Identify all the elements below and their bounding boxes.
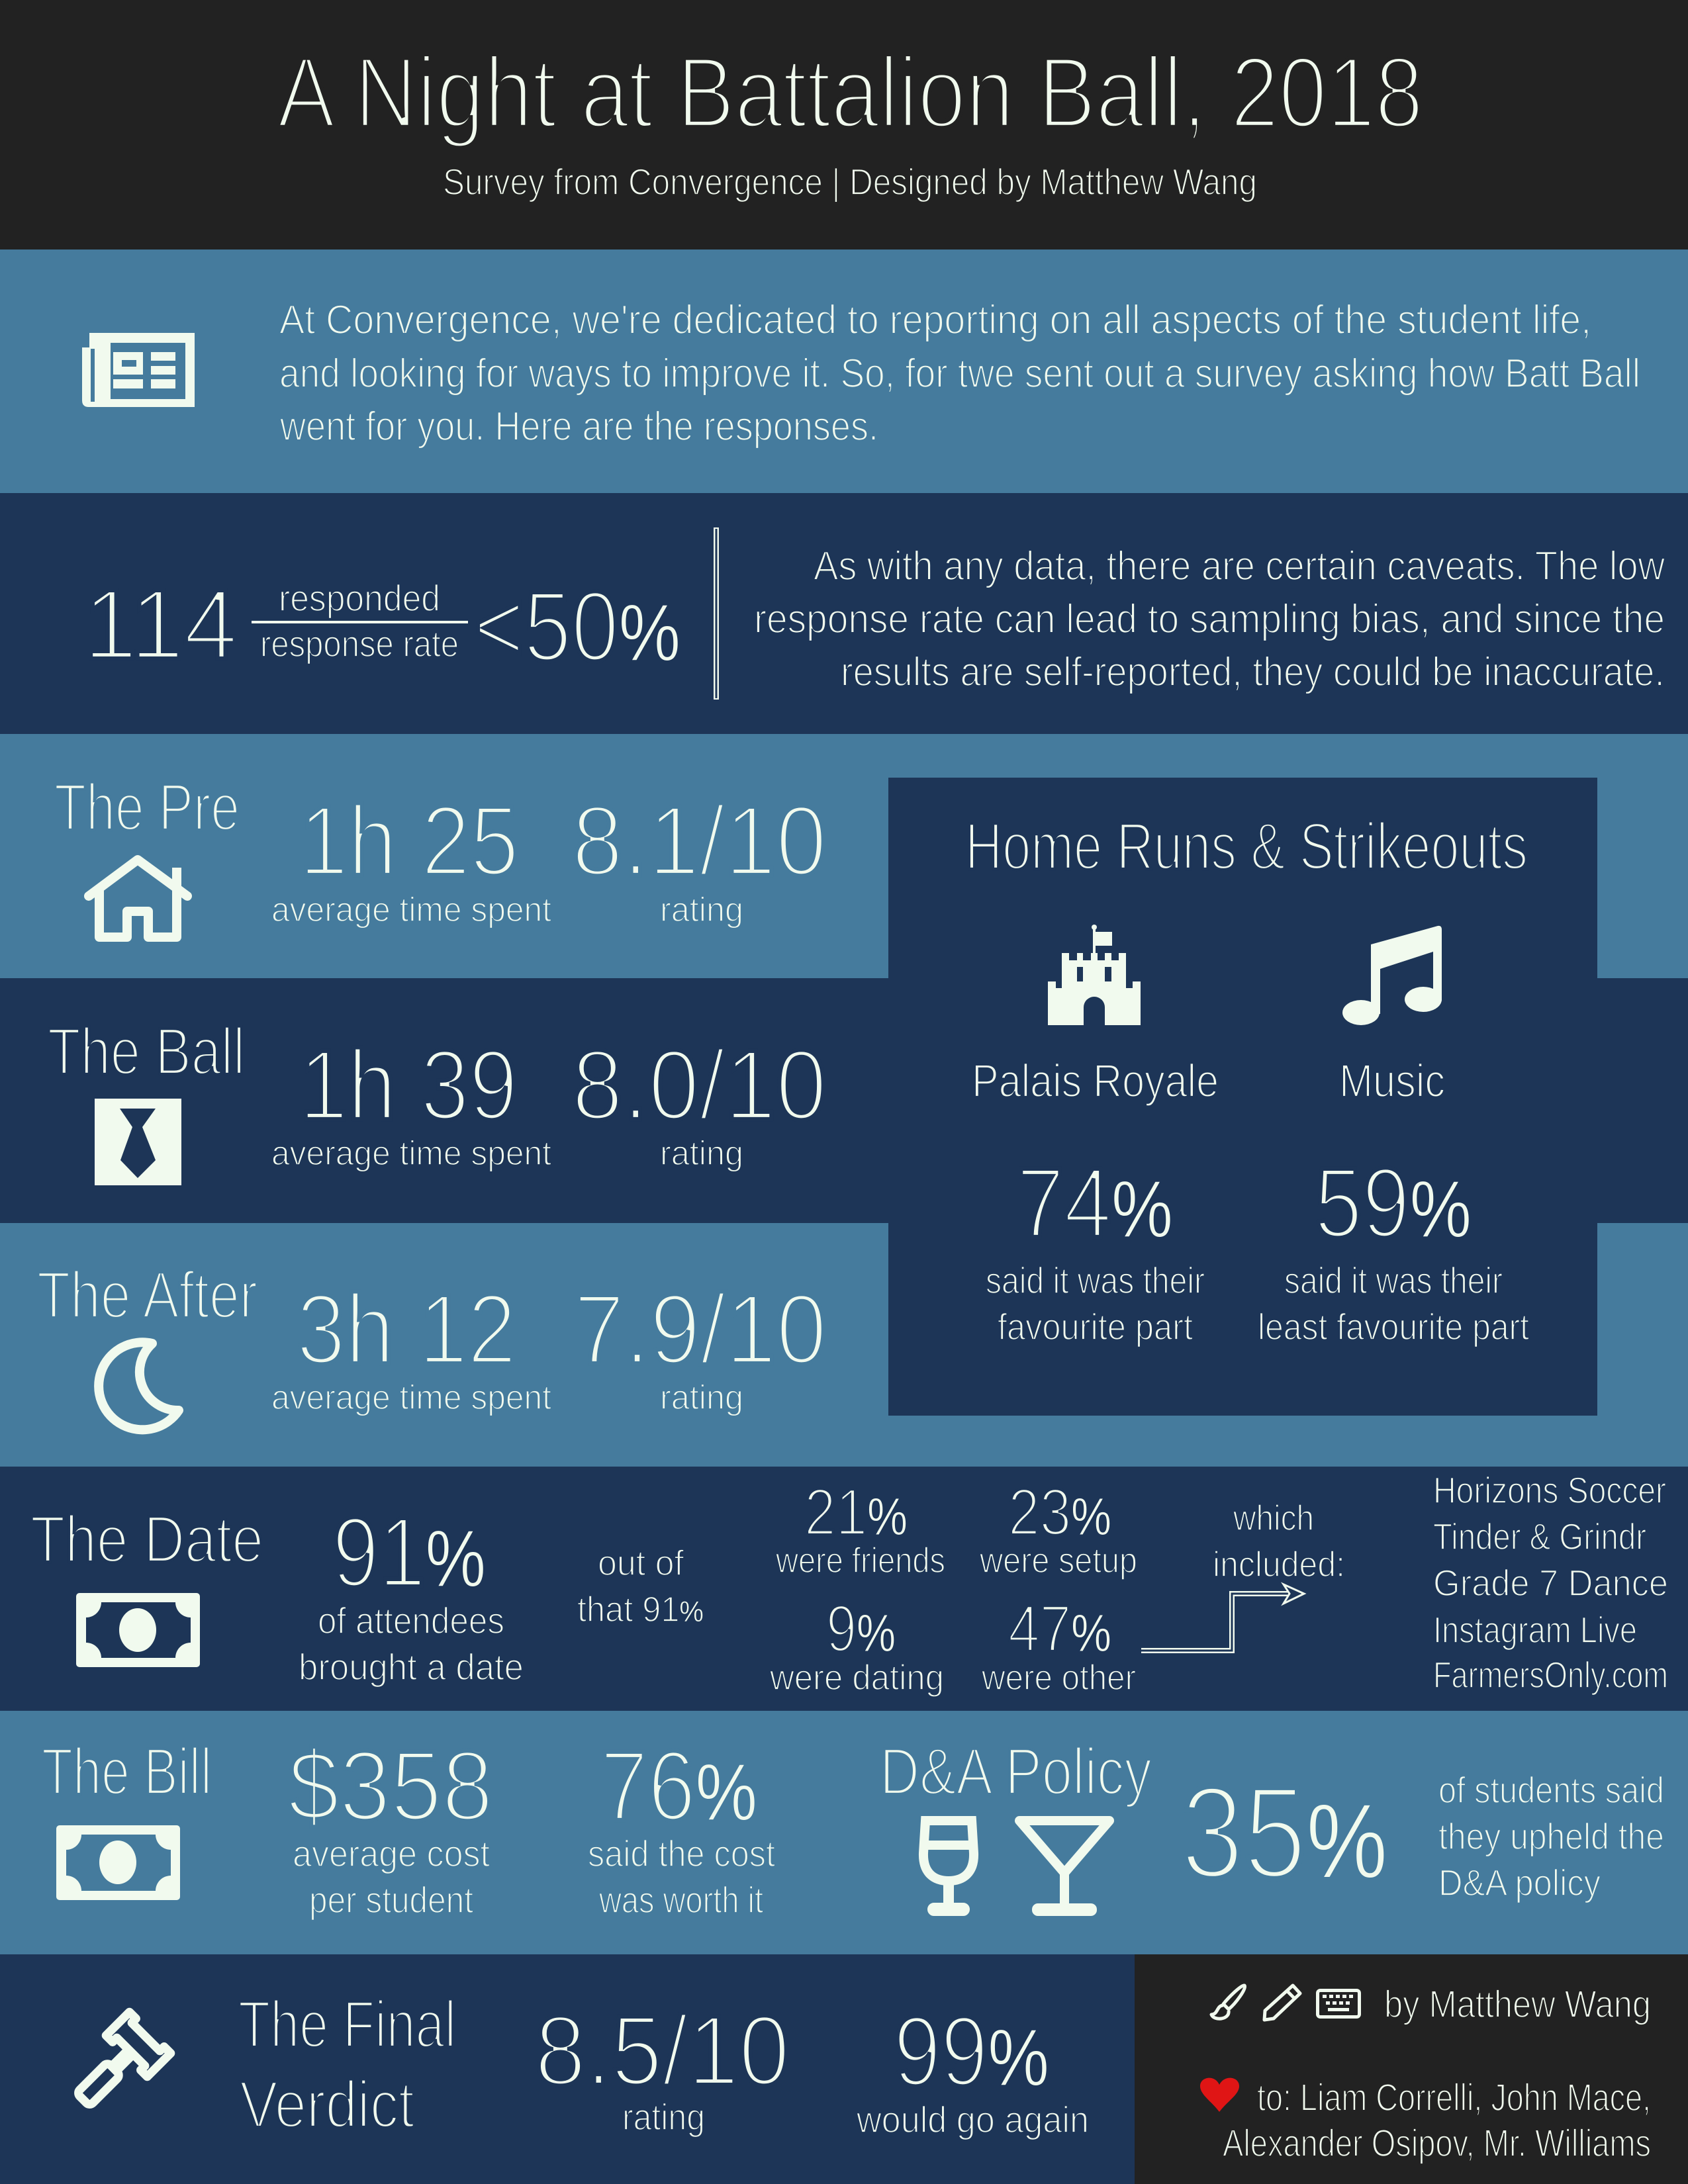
list of other dates: Instagram Live — [1433, 1609, 1637, 1651]
icon: gavel — [62, 2012, 171, 2120]
stat: 91 percent brought a date: 91% — [332, 1496, 486, 1608]
panel: The Bill and D&A Policy — [0, 1711, 1688, 1954]
stat: would go again: would go again — [856, 2099, 1089, 2140]
time spent: average time spent — [271, 1379, 552, 1417]
panel: The Final Verdict — [0, 1954, 1135, 2184]
time spent: 3h 12 — [297, 1273, 516, 1385]
stat: friends: 21% — [804, 1475, 908, 1549]
stat: 91 percent brought a date: of attendees — [318, 1600, 504, 1641]
column: Music: Music — [1339, 1055, 1445, 1107]
intro paragraph — [279, 297, 1640, 449]
rating: 7.9/10 — [574, 1273, 827, 1385]
label: upheld the policy — [1438, 1769, 1664, 1903]
heading: D&A Policy: D&A Policy — [880, 1735, 1152, 1809]
fraction labels — [252, 577, 468, 664]
stat: worth it: was worth it — [598, 1879, 763, 1921]
column: Music: 59% — [1315, 1147, 1472, 1258]
stat: worth it — [588, 1730, 775, 1921]
credit: thanks — [1223, 2076, 1651, 2165]
stat: worth it: said the cost — [588, 1833, 775, 1874]
stat: average cost: $358 — [288, 1730, 493, 1841]
list of other dates — [1433, 1469, 1668, 1696]
stat: 91 percent brought a date: brought a date — [299, 1646, 524, 1688]
heading: The After: The After — [37, 1258, 258, 1332]
time spent: 1h 25 — [299, 785, 519, 896]
stat: setup: 23% — [1008, 1475, 1111, 1549]
icon: martini glass — [1019, 1821, 1109, 1911]
column: Palais Royale — [972, 1055, 1219, 1347]
icon: newspaper — [82, 333, 195, 407]
panel: Home Runs and Strikeouts — [888, 778, 1597, 1416]
heading: The Pre: The Pre — [54, 770, 240, 844]
credit: by Matthew Wang: by Matthew Wang — [1384, 1983, 1651, 2026]
subtitle: Survey from Convergence | Designed by Matthew Wang — [443, 161, 1257, 203]
stat: rating: rating — [622, 2096, 705, 2138]
icon: moon — [99, 1342, 179, 1430]
stat: average cost — [288, 1730, 493, 1921]
rating: rating — [660, 891, 743, 929]
list of other dates: Tinder & Grindr — [1433, 1516, 1646, 1557]
icon: brush — [1211, 1985, 1245, 2019]
rating: 8.1/10 — [572, 785, 827, 896]
stat: other — [981, 1592, 1136, 1698]
column: Music — [1258, 1055, 1529, 1347]
time spent: average time spent — [271, 1134, 552, 1173]
heading: The Date: The Date — [30, 1502, 263, 1576]
label: out of that 91 percent: that 91% — [577, 1590, 704, 1629]
list of other dates: Grade 7 Dance — [1433, 1562, 1668, 1604]
fraction labels: responded — [279, 577, 440, 619]
panel: header band — [0, 0, 1688, 250]
stat: under 50 percent: <50% — [474, 570, 680, 682]
stat: dating: were dating — [769, 1658, 944, 1698]
label: upheld the policy: D&A policy — [1438, 1862, 1601, 1903]
rating: rating — [660, 1134, 743, 1173]
icon: wine glass — [923, 1821, 974, 1911]
stat: dating — [769, 1592, 944, 1698]
heading: Home Runs and Strikeouts: Home Runs & Strikeouts — [965, 809, 1528, 884]
icon: keyboard — [1317, 1991, 1360, 2017]
stat: worth it: 76% — [600, 1730, 757, 1841]
stat: 114 responded: 114 — [83, 569, 238, 680]
panel: The After — [0, 1223, 1688, 1467]
stat: would go again: 99% — [894, 1995, 1049, 2107]
stat: would go again — [856, 1995, 1089, 2140]
icon: house — [89, 860, 187, 937]
time spent — [271, 785, 552, 929]
title: A Night at Battalion Ball, 2018 — [277, 36, 1423, 149]
stat: setup: were setup — [979, 1541, 1137, 1580]
panel: credits — [1135, 1954, 1688, 2184]
fraction labels: response rate — [260, 623, 459, 664]
arrow — [1141, 1584, 1304, 1651]
rating: rating — [660, 1379, 743, 1417]
label: out of that 91 percent: out of — [598, 1543, 684, 1583]
stat: average cost: average cost — [293, 1833, 490, 1874]
column: Palais Royale: 74% — [1017, 1147, 1173, 1258]
heading: The Final Verdict: The Final — [238, 1987, 456, 2062]
panel: The Date — [0, 1467, 1688, 1711]
intro paragraph: went for you. Here are the responses. — [279, 404, 878, 449]
intro paragraph: At Convergence, we're dedicated to reporting on all aspects of the student life, — [279, 297, 1591, 343]
heading: The Ball: The Ball — [48, 1015, 245, 1089]
time spent — [271, 1273, 552, 1417]
icon: castle — [1048, 925, 1141, 1025]
stat: average cost: per student — [309, 1879, 473, 1921]
label: which included — [1213, 1498, 1345, 1584]
icon: music notes — [1342, 926, 1442, 1025]
panel: introduction — [0, 250, 1688, 493]
time spent — [271, 1029, 552, 1173]
label: out of that 91 percent — [577, 1543, 704, 1629]
icon: banknote — [76, 1593, 200, 1667]
panel: The Ball — [0, 978, 1688, 1223]
stat: friends: were friends — [775, 1541, 945, 1580]
label: which included: included: — [1213, 1545, 1345, 1584]
time spent: 1h 39 — [299, 1029, 518, 1140]
icon: banknote — [56, 1825, 180, 1900]
column: Music: said it was their — [1284, 1259, 1503, 1301]
column: Palais Royale: Palais Royale — [972, 1055, 1219, 1107]
label: which included: which — [1233, 1498, 1314, 1538]
stat: setup — [979, 1475, 1137, 1580]
stat: 91 percent brought a date — [299, 1496, 524, 1688]
icon: pencil — [1264, 1985, 1300, 2020]
column: Music: least favourite part — [1258, 1306, 1529, 1347]
stat: other: 47% — [1008, 1592, 1111, 1666]
panel: response rate and caveats — [0, 493, 1688, 734]
panel: The Pre — [0, 734, 1688, 978]
time spent: average time spent — [271, 891, 552, 929]
stat: 35 percent: 35% — [1181, 1759, 1387, 1905]
stat: dating: 9% — [826, 1592, 896, 1666]
stat: rating: 8.5/10 — [535, 1995, 790, 2106]
icon: heart — [1200, 2078, 1239, 2112]
caveats text — [754, 543, 1665, 695]
label: upheld the policy: they upheld the — [1438, 1815, 1664, 1857]
column: Palais Royale: said it was their — [986, 1259, 1205, 1301]
stat: other: were other — [981, 1658, 1136, 1698]
column: Palais Royale: favourite part — [998, 1306, 1193, 1347]
heading: The Final Verdict — [238, 1987, 456, 2142]
icon: tie — [95, 1099, 181, 1185]
heading: The Bill: The Bill — [42, 1735, 212, 1809]
heading: The Final Verdict: Verdict — [240, 2068, 414, 2142]
rating: 8.0/10 — [572, 1029, 827, 1140]
stat: friends — [775, 1475, 945, 1580]
